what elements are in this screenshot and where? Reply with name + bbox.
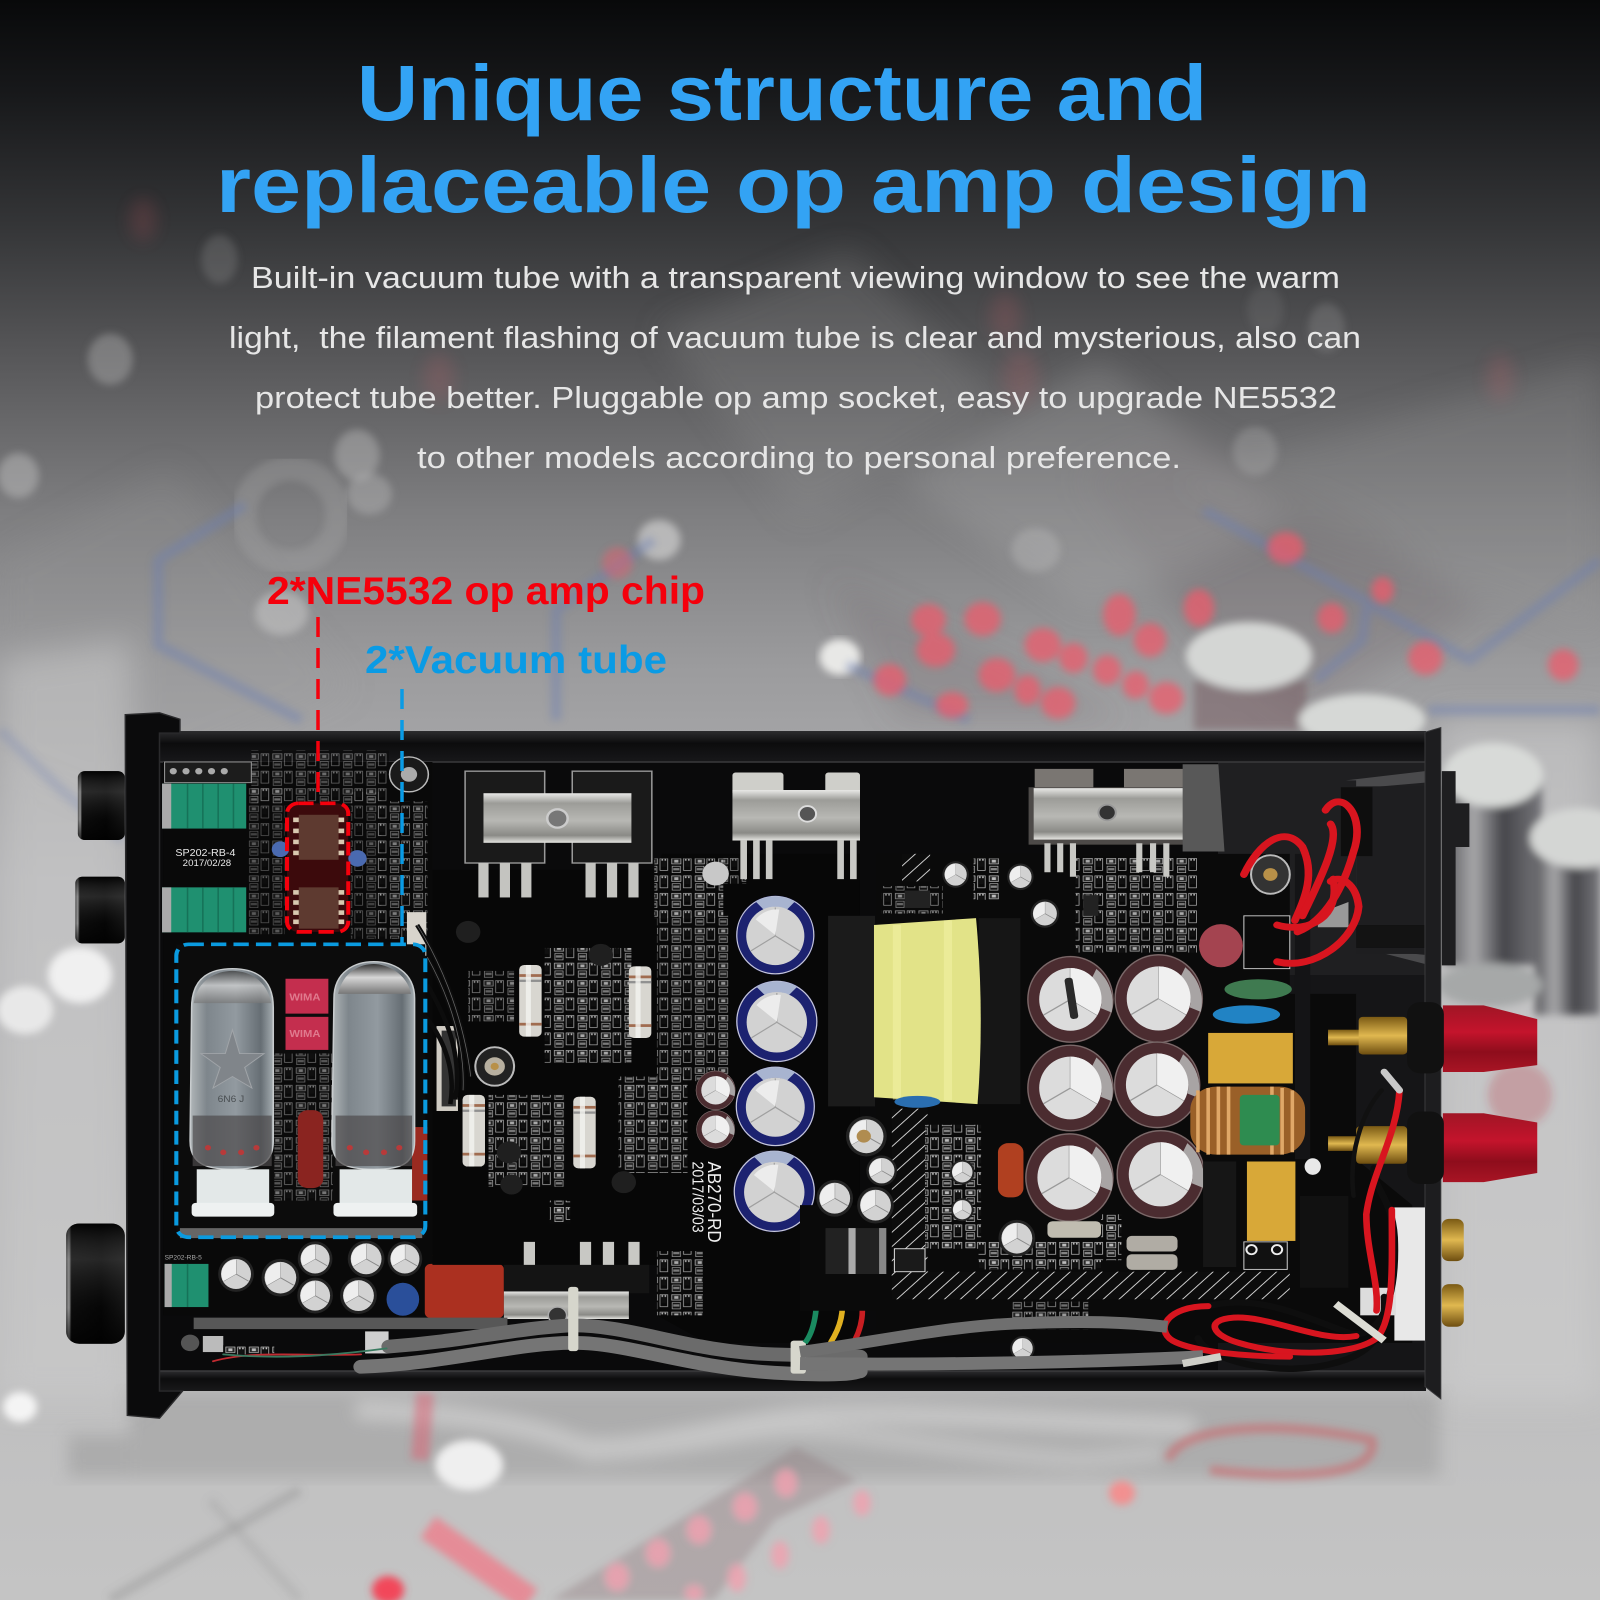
left circuit board: 2017/02/28: [183, 859, 231, 868]
large brown capacitors: [1025, 954, 1205, 1222]
description text block: [229, 260, 1361, 475]
right side main circuit board: AB270-RD: [704, 1161, 725, 1243]
blue dashed box around vacuum tubes: [176, 944, 425, 1237]
WIMA capacitors: WIMA: [289, 1029, 321, 1040]
red dashed box around op amp chips: [287, 803, 348, 932]
coloured wire bundle: [805, 1228, 862, 1347]
small capacitors: [816, 861, 1059, 1361]
speaker and cable wiring: [1165, 1072, 1399, 1369]
speaker binding posts: [1328, 1002, 1537, 1184]
callout: op amp chip: 2*NE5532 op amp chip: [267, 570, 705, 613]
left circuit board: SP202-RB-5: [165, 1255, 202, 1261]
red filter capacitor and toroid: [425, 1241, 504, 1318]
green potentiometer modules: [162, 784, 246, 1307]
RCA jacks and white connector: [1300, 1196, 1464, 1341]
grey signal cables: [213, 1325, 860, 1374]
blue electrolytic capacitors: [696, 896, 818, 1232]
common mode choke: [1190, 1087, 1305, 1155]
safety capacitors and varistors: [1199, 855, 1332, 1283]
WIMA capacitors: WIMA: [289, 992, 321, 1003]
cables right part: [800, 1322, 1203, 1364]
right vacuum tube: [332, 962, 417, 1217]
heat sink 3: [1029, 769, 1187, 877]
transformer: [828, 916, 1020, 1108]
amplifier photo illustration: [66, 713, 1537, 1418]
front panel plate: [125, 713, 182, 1418]
power inlet socket: [1318, 771, 1469, 965]
WIMA capacitors: [286, 979, 328, 1050]
op amp chips: [272, 803, 367, 932]
right side main circuit board: [417, 854, 860, 1343]
left circuit board: SP202-RB-4: [175, 849, 236, 859]
reflection details: [3, 1392, 1372, 1600]
heat sink 2: [732, 773, 860, 879]
red power wires: [1244, 802, 1359, 963]
description text block: Built-in vacuum tube with a transparent viewing window to see the warm: [251, 260, 1340, 295]
left vacuum tube: [190, 969, 274, 1217]
front panel knobs: [66, 771, 125, 1344]
power transistors with heat sink: [465, 771, 652, 897]
yellow film capacitors: [1203, 1033, 1295, 1267]
cable ties: [568, 1287, 806, 1374]
title: [216, 48, 1371, 229]
right circuit board: [800, 854, 1412, 1343]
left half of amplifier internals: [66, 713, 862, 1418]
right end plate: [1425, 728, 1441, 1399]
left circuit board: [163, 751, 432, 1315]
background cylinders behind right of amplifier: [0, 743, 1600, 1127]
left vacuum tube: 6N6 J: [218, 1094, 244, 1105]
lower heat sink: [504, 1242, 649, 1324]
vacuum tube section: [176, 944, 427, 1238]
right half of amplifier internals: [800, 728, 1537, 1399]
chassis body: [158, 731, 1426, 1391]
description text block: light, the filament flashing of vacuum tube is clear and mysterious, also can: [229, 320, 1361, 355]
description text block: to other models according to personal preference.: [417, 440, 1181, 475]
description text block: protect tube better. Pluggable op amp socket, easy to upgrade NE5532: [255, 380, 1337, 415]
cable ties right: [1183, 1304, 1384, 1364]
lower daughter board strip: [181, 1318, 507, 1354]
lower left capacitor bank: [218, 1240, 422, 1316]
right side main circuit board: 2017/03/03: [688, 1161, 706, 1233]
title: Unique structure and: [357, 48, 1207, 137]
title: replaceable op amp design: [216, 140, 1371, 229]
resistors: [1047, 1221, 1178, 1270]
reflection of amplifier on bottom surface: [68, 1392, 1440, 1477]
callout: vacuum tube: 2*Vacuum tube: [365, 639, 667, 682]
